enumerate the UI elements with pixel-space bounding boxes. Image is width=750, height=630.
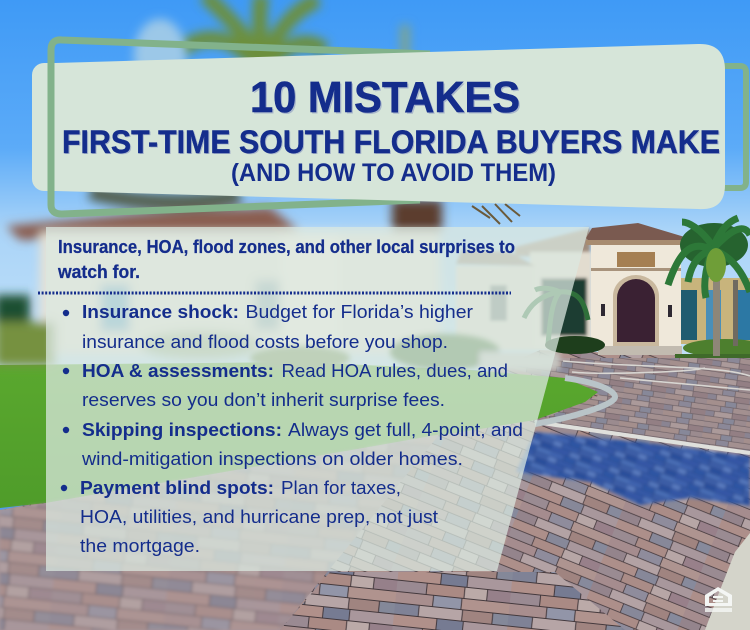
- blurred house and palms on the left: [0, 0, 442, 366]
- title line 2: FIRST-TIME SOUTH FLORIDA BUYERS MAKE: [63, 125, 721, 161]
- intro heading: [57, 237, 515, 282]
- banner frame: [51, 40, 430, 214]
- bullet: insurance shock: [63, 301, 473, 352]
- intro heading: Insurance, HOA, flood zones, and other local surprises to: [58, 237, 515, 257]
- panel: translucent text panel: [46, 227, 589, 571]
- blurred palm crown: [180, 0, 325, 70]
- small palm by window: [524, 288, 588, 345]
- wavy divider: [38, 292, 511, 294]
- bullet list: [61, 301, 523, 556]
- title line 3: (AND HOW TO AVOID THEM): [231, 159, 556, 187]
- bullet: payment blind spots: HOA, utilities, and hurricane prep, not just: [80, 506, 438, 527]
- driveway curb bands: [535, 361, 750, 630]
- title banner: FIRST-TIME SOUTH FLORIDA BUYERS MAKE: [62, 124, 720, 160]
- blurred pale palm crown: [134, 19, 186, 91]
- title banner: 10 MISTAKES: [250, 73, 520, 122]
- bullet: HOA and assessments: HOA & assessments:: [82, 360, 274, 381]
- thin palm fronds under banner: [472, 204, 520, 224]
- bullet: payment blind spots: [61, 477, 438, 556]
- banner back panel left: [32, 63, 92, 191]
- palm tree right: [668, 218, 750, 356]
- sky: [0, 0, 750, 370]
- bullet: skipping inspections: Always get full, 4-point, and: [288, 419, 523, 440]
- banner back frame right: [720, 66, 746, 188]
- driveway pavers: [0, 350, 750, 630]
- bullet: insurance shock: insurance and flood costs before you shop.: [82, 331, 448, 352]
- bullet: skipping inspections: [63, 419, 523, 469]
- lawn: [0, 362, 615, 508]
- title line 1: 10 MISTAKES: [252, 74, 522, 124]
- banner front panel: [55, 44, 725, 209]
- icon: equal housing logo: [705, 587, 732, 612]
- bullet: insurance shock: Insurance shock:: [82, 301, 239, 322]
- planting beds: [545, 336, 750, 358]
- bullet: payment blind spots: the mortgage.: [80, 535, 200, 556]
- bullet: HOA and assessments: Read HOA rules, dues, and: [282, 360, 508, 381]
- building far right: [681, 278, 750, 344]
- bullet: payment blind spots: Payment blind spots:: [80, 477, 274, 498]
- title banner: [32, 40, 746, 214]
- house entry tower: [586, 223, 688, 355]
- bullet: HOA and assessments: reserves so you don’t inherit surprise fees.: [82, 389, 445, 410]
- bullet: payment blind spots: Plan for taxes,: [281, 477, 401, 498]
- bullet: insurance shock: Budget for Florida’s higher: [246, 301, 473, 322]
- bullet: skipping inspections: wind-mitigation inspections on older homes.: [81, 448, 463, 469]
- bullet: skipping inspections: Skipping inspections:: [82, 419, 282, 440]
- house left wing: [456, 228, 592, 350]
- intro heading: watch for.: [57, 262, 140, 282]
- bullet: HOA and assessments: [63, 360, 508, 410]
- blurred shrubs: [250, 334, 560, 370]
- blurred foreground pavers: [0, 434, 439, 630]
